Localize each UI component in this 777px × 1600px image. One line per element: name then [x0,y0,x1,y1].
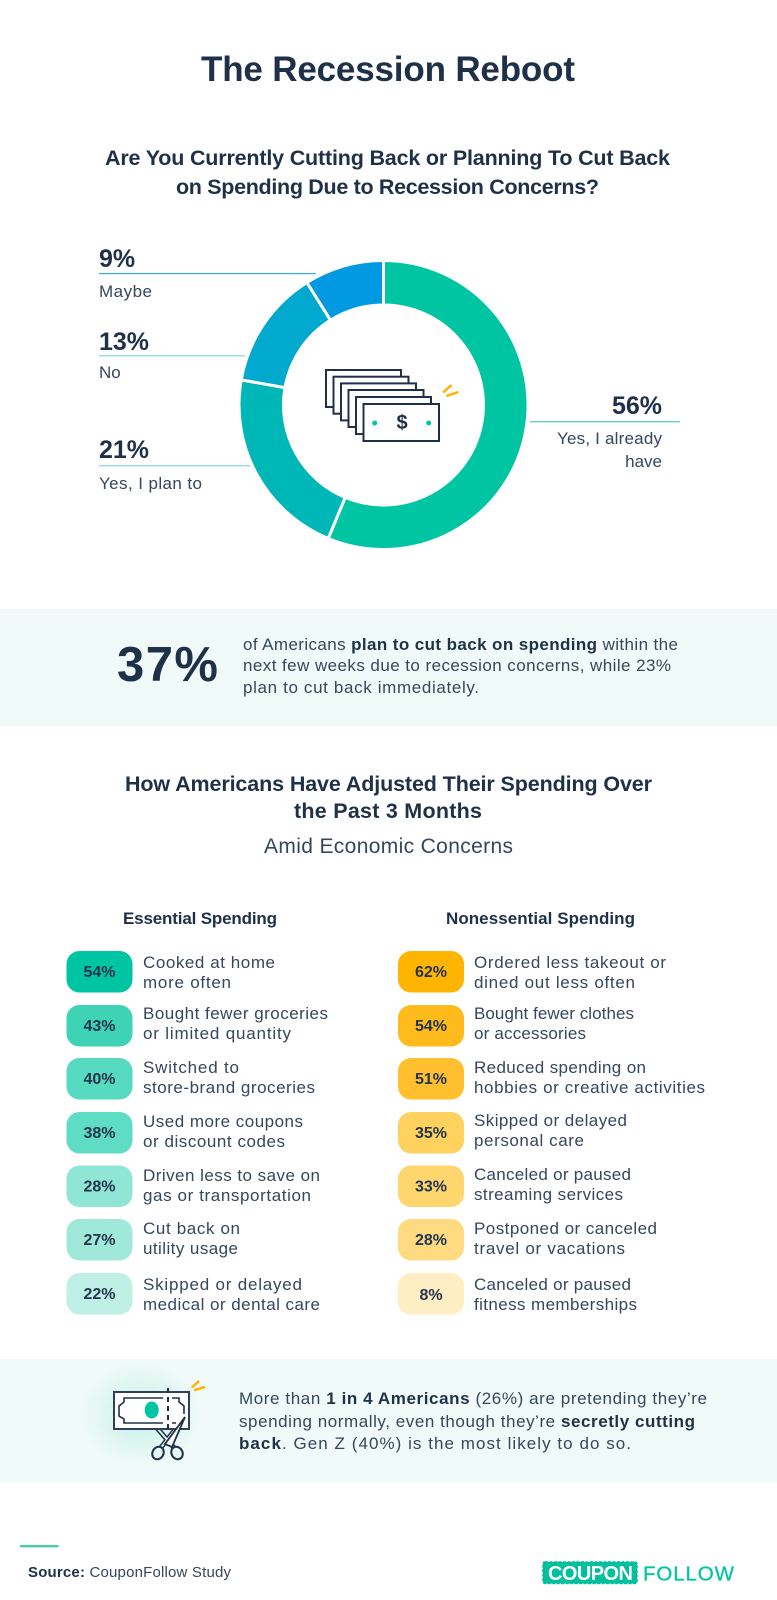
row: 40% store brand: 40% [83,1071,116,1088]
row: 8% fitness: 8% [419,1287,443,1304]
title: The Recession Reboot [201,50,575,89]
row: 33% streaming: streaming services [474,1185,623,1204]
label: maybe 9%: 9% [99,245,135,273]
row: 22% medical: medical or dental care [143,1295,320,1314]
row: 33% streaming [398,1165,631,1207]
column heading: nonessential spending: Nonessential Spending [446,909,635,928]
row: 43% fewer groceries: 43% [83,1018,116,1035]
callout text: spending normally, even though they’re secretly cutting [239,1412,695,1431]
label: no 13%: No [99,363,121,382]
heading: adjusted spending [125,772,653,858]
label: yes already 56%: have [625,452,662,471]
donut segment: yes already 56% [328,260,528,550]
logo: CouponFollow: FOLLOW [643,1562,735,1586]
row: 62% takeout: 62% [415,964,447,981]
row: 33% streaming: Canceled or paused [474,1165,631,1184]
row: 54% cooked at home [66,951,275,992]
list: essential spending [66,951,328,1314]
callout text: next few weeks due to recession concerns, while 23% [243,656,671,675]
donut segment: no 13% [241,282,330,388]
row: 54% clothes: Bought fewer clothes [474,1004,634,1023]
label: yes plan to 21%: Yes, I plan to [99,474,202,493]
row: 28% travel: Postponed or canceled [474,1219,657,1238]
row: 38% coupons: 38% [83,1125,116,1142]
row: 35% personal care [398,1111,627,1154]
callout text: back. Gen Z (40%) is the most likely to do so. [239,1434,631,1453]
logo: CouponFollow [543,1562,735,1586]
row: 51% hobbies: Reduced spending on [474,1058,646,1077]
row: 54% cooked at home: more often [143,973,231,992]
row: 22% medical: 22% [83,1286,116,1303]
row: 51% hobbies [398,1058,705,1100]
label: yes already 56%: 56% [612,392,662,420]
row: 28% driven less: Driven less to save on [143,1166,320,1185]
row: 51% hobbies: 51% [415,1071,447,1088]
stat: 37%: 37% [117,638,218,692]
row: 35% personal care: Skipped or delayed [474,1111,627,1130]
row: 40% store brand: Switched to [143,1058,239,1077]
row: 35% personal care: personal care [474,1131,584,1150]
row: 22% medical [66,1273,320,1314]
row: 27% utility usage: 27% [83,1232,116,1249]
row: 27% utility usage [66,1219,240,1260]
row: 54% cooked at home: Cooked at home [143,953,275,972]
panel: 1 in 4 callout [0,1359,777,1483]
icon: bill and scissors [114,1382,204,1461]
source: Source: CouponFollow Study [28,1564,232,1581]
row: 62% takeout: dined out less often [474,973,635,992]
row: 28% driven less: gas or transportation [143,1186,311,1205]
label: yes already 56% [530,392,680,471]
row: 35% personal care: 35% [415,1125,447,1142]
heading: adjusted spending: the Past 3 Months [294,799,482,823]
icon: stack of money: $ [396,412,408,434]
label: yes plan to 21%: 21% [99,436,149,464]
row: 28% travel: 28% [415,1232,447,1249]
row: 38% coupons: Used more coupons [143,1112,303,1131]
row: 54% clothes: 54% [415,1018,447,1035]
row: 8% fitness: fitness memberships [474,1295,637,1314]
row: 38% coupons [66,1112,303,1154]
column heading: essential spending: Essential Spending [123,909,277,928]
label: maybe 9% [99,245,316,301]
row: 62% takeout: Ordered less takeout or [474,953,666,972]
heading: adjusted spending: How Americans Have Adjusted Their Spending Over [125,772,653,796]
heading: cutting back question: on Spending Due to Recession Concerns? [176,175,599,199]
heading: cutting back question: Are You Currently Cutting Back or Planning To Cut Back [105,146,670,170]
label: yes plan to 21% [99,436,250,493]
row: 28% travel [398,1219,657,1260]
row: 40% store brand [66,1058,315,1100]
callout text: More than 1 in 4 Americans (26%) are pretending they’re [239,1389,707,1408]
row: 8% fitness [398,1273,637,1314]
heading: cutting back question [105,146,670,199]
row: 33% streaming: 33% [415,1178,447,1196]
row: 54% cooked at home: 54% [83,964,116,981]
row: 54% clothes: or accessories [474,1024,586,1043]
donut segment: maybe 9% [307,260,384,320]
panel: 37% callout [0,609,777,726]
list: nonessential spending [398,951,705,1314]
row: 51% hobbies: hobbies or creative activities [474,1078,705,1097]
logo: CouponFollow: COUPON [548,1563,633,1585]
row: 27% utility usage: Cut back on [143,1219,240,1238]
row: 43% fewer groceries: or limited quantity [143,1024,292,1043]
row: 27% utility usage: utility usage [143,1239,238,1258]
row: 40% store brand: store-brand groceries [143,1078,315,1097]
divider accent [20,1545,58,1547]
row: 43% fewer groceries [66,1004,328,1046]
icon: stack of money [326,370,457,441]
label: no 13%: 13% [99,328,149,356]
heading: adjusted spending: Amid Economic Concerns [264,835,513,858]
row: 43% fewer groceries: Bought fewer groceries [143,1004,328,1023]
label: no 13% [99,328,245,382]
row: 8% fitness: Canceled or paused [474,1275,631,1294]
row: 38% coupons: or discount codes [143,1132,285,1151]
label: maybe 9%: Maybe [99,282,152,301]
row: 28% driven less [66,1166,320,1207]
callout text: of Americans plan to cut back on spending within the [243,635,678,654]
callout text: plan to cut back immediately. [243,678,479,697]
row: 28% driven less: 28% [83,1178,116,1196]
row: 54% clothes [398,1004,634,1046]
donut segment: yes plan to 21% [239,380,345,538]
donut chart [239,260,528,550]
row: 28% travel: travel or vacations [474,1239,625,1258]
label: yes already 56%: Yes, I already [557,429,662,448]
row: 22% medical: Skipped or delayed [143,1275,302,1294]
row: 62% takeout [398,951,666,992]
